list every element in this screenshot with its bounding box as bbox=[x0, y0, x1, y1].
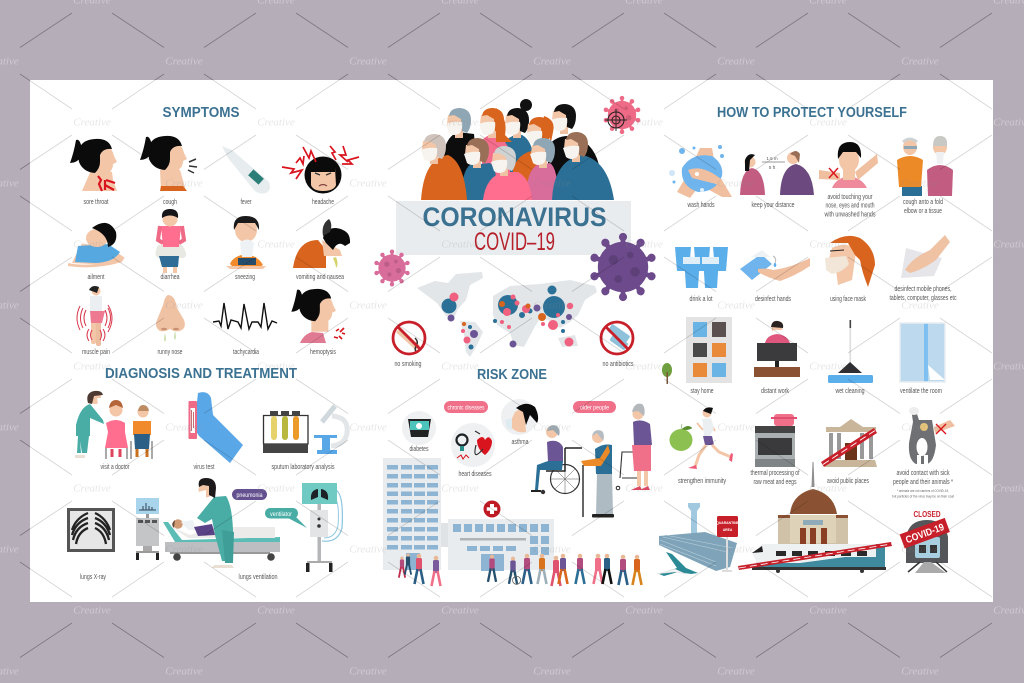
label: stay home: stay home bbox=[690, 386, 714, 395]
illustration: tall hospital building bbox=[383, 458, 441, 570]
label: thermal processing bbox=[750, 468, 800, 486]
icon: visit a doctor bbox=[75, 391, 152, 459]
crowd of small people bbox=[399, 553, 642, 586]
icon: ventilator machine bbox=[302, 483, 342, 572]
icon: pink virus with target bbox=[603, 96, 641, 134]
icon: using face mask bbox=[825, 236, 875, 287]
banner: covid-19 closed: COVID-19 bbox=[904, 522, 946, 546]
icon: sore throat bbox=[70, 139, 117, 191]
icon: sputum rack and microscope bbox=[263, 406, 347, 454]
icon: lungs x-ray bbox=[67, 508, 115, 552]
icon: avoid touching face bbox=[819, 142, 878, 188]
label: lungs x-ray: lungs X-ray bbox=[80, 572, 106, 581]
icon: no smoking bbox=[393, 322, 425, 354]
callout: pneumonia: pneumonia bbox=[236, 492, 263, 499]
icon: mauve virus bbox=[374, 250, 410, 286]
label: sore throat: sore throat bbox=[84, 197, 108, 206]
icon: keep your distance: 5 ft bbox=[769, 165, 776, 170]
subtitle: covid-19: COVID–19 bbox=[474, 228, 555, 256]
label: tachycardia: tachycardia bbox=[233, 347, 260, 356]
panel: how to protect yourself bbox=[657, 105, 957, 576]
heading: diagnosis and treatment: DIAGNOSIS AND TREATMENT bbox=[105, 366, 297, 382]
label: virus test: virus test bbox=[194, 462, 214, 471]
icon: avoid public places bbox=[821, 419, 877, 467]
label: cough: cough bbox=[163, 197, 177, 206]
label: no smoking: no smoking bbox=[394, 359, 422, 368]
panel: centre title with crowd bbox=[374, 96, 657, 368]
icon: patient monitor bbox=[136, 498, 159, 560]
map: continents bbox=[417, 272, 597, 357]
callout: ventilator bbox=[265, 508, 307, 528]
label: disinfect hands: desinfect hands bbox=[755, 294, 791, 303]
illustration: low hospital building bbox=[441, 519, 554, 571]
label: wash hands: wash hands bbox=[687, 200, 715, 209]
icon: disinfect mobile phones bbox=[901, 235, 950, 278]
icon: hemoptysis bbox=[291, 289, 345, 343]
label: cough into elbow bbox=[903, 197, 943, 215]
label: thermal processing: raw meat and eegs bbox=[754, 477, 797, 486]
label: disinfect mobile phones: desinfect mobile phones, bbox=[894, 284, 952, 293]
label: no antibiotics: no antibiotics bbox=[602, 359, 634, 368]
label: vomiting and nausea: vomiting and nausea bbox=[296, 272, 345, 281]
label: using face mask: using face mask bbox=[830, 294, 866, 303]
banner: title bbox=[396, 201, 631, 256]
illustration: closed metro tunnel: CLOSED bbox=[914, 509, 940, 519]
icon: thermal processing stove bbox=[755, 414, 797, 467]
label: distant work: distant work bbox=[761, 386, 789, 395]
label: asthma: asthma bbox=[512, 437, 529, 446]
icon: fever thermometer bbox=[222, 146, 270, 194]
icon: keep your distance: 1,5 m bbox=[766, 156, 778, 161]
chart: world map with bubbles bbox=[417, 272, 597, 357]
icon: red cross sign bbox=[484, 500, 500, 518]
icon: heart diseases bbox=[451, 423, 495, 467]
icon: keep your distance bbox=[740, 151, 814, 195]
icon: ailment bbox=[68, 223, 125, 267]
label: heart diseases: heart diseases bbox=[458, 469, 492, 478]
label: avoid public places: avoid public places bbox=[827, 476, 869, 485]
illustration: airport with plane bbox=[657, 503, 737, 576]
callout: chronic diseases bbox=[444, 401, 488, 413]
figure: person in wheelchair bbox=[531, 425, 582, 494]
label: hemoptysis: hemoptysis bbox=[310, 347, 336, 356]
icon: tachycardia bbox=[213, 303, 277, 329]
icon: avoid contact with animals bbox=[909, 407, 955, 465]
label: avoid contact: avoid contact with sick bbox=[896, 468, 950, 477]
label: runny nose: runny nose bbox=[158, 347, 182, 356]
label: lungs ventilation: lungs ventilation bbox=[238, 572, 278, 581]
label: sneezing: sneezing bbox=[235, 272, 255, 281]
label: cough into elbow: elbow or a tissue bbox=[904, 206, 942, 215]
callout: ventilator: ventilator bbox=[270, 511, 293, 518]
label: avoid contact: people and their animals * bbox=[893, 477, 953, 486]
icon: hospital bed with patient bbox=[163, 519, 280, 561]
icon: virus test bbox=[188, 392, 243, 463]
icon: cough into elbow bbox=[897, 136, 953, 196]
label: diabetes: diabetes bbox=[410, 444, 429, 453]
icon: diarrhea bbox=[156, 209, 186, 273]
label: keep your distance: keep your distance bbox=[752, 200, 794, 209]
label: fever: fever bbox=[240, 197, 252, 206]
heading: symptoms: SYMPTOMS bbox=[162, 105, 240, 121]
illustration: train with barrier tape bbox=[738, 542, 892, 573]
icon: wash hands bbox=[669, 145, 732, 198]
icon: stay home bbox=[662, 317, 732, 384]
icon: nurse bbox=[197, 478, 234, 568]
label: avoid touching: avoid touching your bbox=[828, 192, 873, 201]
icon: asthma bbox=[501, 399, 538, 435]
illustration: railway station bbox=[778, 462, 848, 544]
icon: distant work bbox=[754, 321, 800, 377]
label: disinfect mobile phones: tablets, computer, glasses etc bbox=[890, 293, 957, 302]
icon: runny nose bbox=[156, 295, 185, 342]
sign: quarantine area: AREA bbox=[723, 528, 733, 532]
label: cough into elbow: cough anto a fold bbox=[903, 197, 943, 206]
label: muscle pain: muscle pain bbox=[82, 347, 110, 356]
icon: cough bbox=[140, 136, 197, 191]
heading: how to protect yourself: HOW TO PROTECT YOURSELF bbox=[717, 105, 907, 121]
sign: quarantine area bbox=[716, 516, 740, 572]
callout: chronic diseases: chronic diseases bbox=[448, 404, 485, 412]
heading: risk zone: RISK ZONE bbox=[477, 367, 547, 383]
icon: purple virus bbox=[589, 233, 657, 301]
panel: risk zone bbox=[383, 367, 652, 586]
illustration: crowd wearing masks bbox=[421, 99, 614, 200]
title: coronavirus: CORONAVIRUS bbox=[422, 202, 606, 232]
label: avoid touching: nose, eyes and mouth bbox=[826, 201, 874, 210]
white poster panel bbox=[30, 80, 993, 602]
label: thermal processing: thermal processing of bbox=[750, 468, 800, 477]
illustration: closed metro tunnel bbox=[906, 509, 948, 573]
icon: vomiting bbox=[293, 219, 350, 268]
footnote: animals: but particles of the virus may be on their coat bbox=[892, 494, 954, 498]
label: avoid touching: with unwashed hands bbox=[824, 209, 876, 218]
label: disinfect mobile phones bbox=[890, 284, 957, 302]
label: drink a lot: drink a lot bbox=[690, 294, 712, 303]
callout: older people bbox=[573, 401, 616, 413]
icon: sneezing bbox=[226, 216, 266, 269]
icon: wet cleaning bbox=[828, 320, 873, 383]
icon: diabetes bbox=[402, 411, 436, 445]
label: visit a doctor: visit a doctor bbox=[100, 462, 130, 471]
icon: disinfect hands bbox=[740, 250, 810, 281]
footnote: animals: * animals are not carriers of COVID-19, bbox=[897, 489, 949, 493]
figure: old man with cane bbox=[581, 430, 614, 518]
figure: old woman with walker bbox=[616, 404, 652, 490]
label: sputum laboratory analysis: sputum laboratory analysis bbox=[272, 462, 335, 471]
sign: quarantine area: QUARANTINE bbox=[716, 521, 740, 525]
label: diarrhea: diarrhea bbox=[160, 272, 180, 281]
icon: ventilate the room bbox=[900, 323, 945, 382]
label: ailment: ailment bbox=[88, 272, 104, 281]
label: headache: headache bbox=[312, 197, 334, 206]
footnote: animals bbox=[892, 489, 954, 498]
icon: drink a lot bbox=[675, 247, 728, 288]
callout: older people: older people bbox=[580, 404, 609, 412]
label: strengthen immunity: strengthen immunity bbox=[678, 476, 726, 485]
label: avoid touching bbox=[824, 192, 876, 218]
label: wet cleaning: wet cleaning bbox=[835, 386, 864, 395]
icon: headache bbox=[282, 146, 359, 194]
icon: muscle pain bbox=[77, 286, 112, 346]
panel: diagnosis and treatment bbox=[67, 366, 347, 581]
icon: no antibiotics bbox=[601, 322, 633, 354]
label: avoid contact bbox=[893, 468, 953, 486]
label: ventilate the room: ventilate the room bbox=[900, 386, 942, 395]
data bubbles bbox=[442, 286, 574, 350]
callout: pneumonia bbox=[232, 489, 267, 500]
icon: strengthen immunity bbox=[670, 407, 733, 469]
panel: symptoms bbox=[68, 105, 359, 356]
